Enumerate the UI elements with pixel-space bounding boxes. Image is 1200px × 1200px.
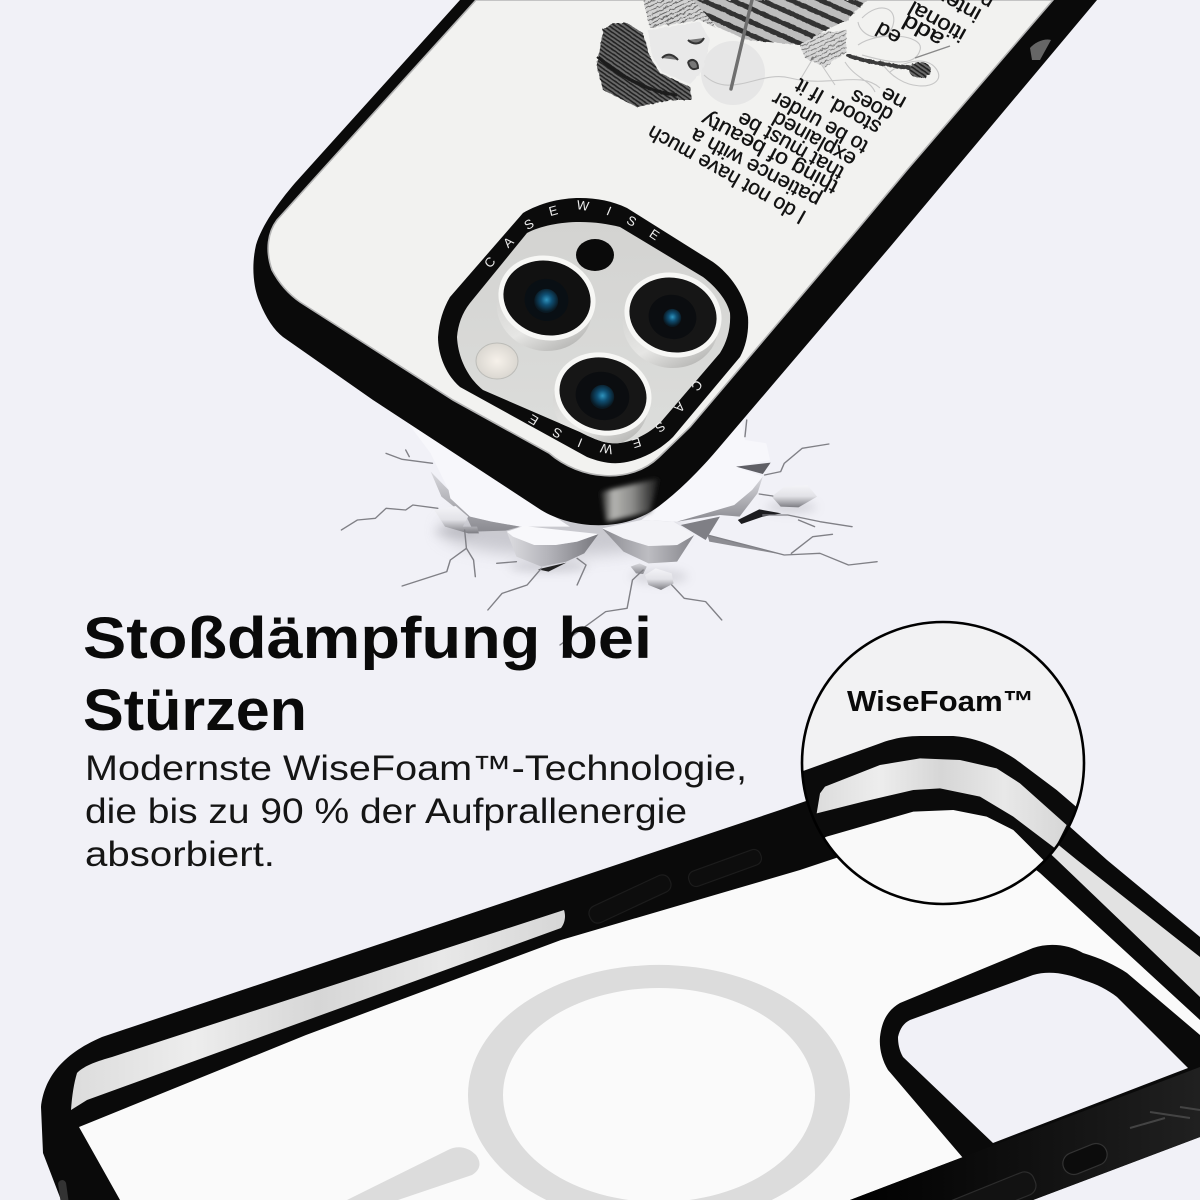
body text: die bis zu 90 % der Aufprallenergie <box>85 792 687 831</box>
frame streaks <box>1130 1107 1200 1128</box>
body text: absorbiert. <box>85 835 275 874</box>
outer black frame <box>41 764 1200 1200</box>
crater: cracked ground under the phone <box>341 420 877 645</box>
magsafe ring <box>468 965 850 1200</box>
foam gap right <box>1040 838 1200 997</box>
heading <box>83 606 652 743</box>
lens bottom <box>554 352 652 444</box>
camera plate <box>457 222 730 443</box>
stick <box>731 0 752 89</box>
upside-down poem on the case <box>644 0 997 228</box>
left slot <box>58 1180 69 1200</box>
foam gap left <box>71 910 565 1110</box>
magnified frame corner <box>804 736 1076 860</box>
camera ring <box>438 198 748 464</box>
camera cut-out opening <box>898 973 1188 1143</box>
upside-down poem on the case: I do not have much <box>644 120 810 228</box>
bottom edge of frame <box>850 1067 1200 1200</box>
needle <box>915 46 950 58</box>
upside-down poem on the case: that must be <box>734 107 848 184</box>
callout circle: WiseFoam magnifier <box>780 622 1084 910</box>
bumper highlight <box>600 478 659 522</box>
microphone hole <box>576 239 614 271</box>
upside-down poem on the case: stood. If it <box>791 73 885 139</box>
upside-down poem on the case: ed <box>872 17 905 49</box>
flash <box>476 343 518 379</box>
face <box>648 22 710 84</box>
ring body <box>438 198 748 463</box>
body text: Modernste WiseFoam™-Technologie, <box>85 749 747 788</box>
lower phone case, inside view <box>41 764 1200 1200</box>
circle fill <box>802 622 1084 904</box>
foam strip <box>817 758 1067 848</box>
speaker button bottom <box>1060 1140 1110 1178</box>
upside-down poem on the case: patience with a <box>687 123 825 211</box>
impact shadow <box>440 504 680 556</box>
lens right <box>624 272 722 368</box>
upper phone with clear case <box>253 0 1097 526</box>
light scribbles <box>701 8 939 105</box>
brand text bottom: CASEWISE <box>528 381 702 454</box>
pill mark <box>347 1147 479 1200</box>
side buttons top <box>586 847 763 926</box>
scarf and light body <box>643 0 716 28</box>
screen <box>268 0 1053 476</box>
upside-down poem on the case: itional <box>905 0 970 46</box>
interior <box>824 810 1044 903</box>
lens top-left <box>498 256 596 351</box>
circle outline <box>802 622 1084 904</box>
case interior <box>79 842 1200 1200</box>
upside-down poem on the case: add <box>898 10 948 51</box>
upside-down poem on the case: explained <box>768 107 860 171</box>
camera cut-out frame <box>880 945 1200 1158</box>
hat <box>597 23 692 107</box>
dark striped body <box>693 0 867 45</box>
crater shapes <box>341 420 877 645</box>
arm <box>847 55 930 70</box>
sketch illustration <box>597 0 950 107</box>
face features <box>662 38 704 69</box>
hat band <box>598 57 677 95</box>
small hand tip <box>909 62 931 78</box>
black bumper <box>253 0 1097 525</box>
bottom side button <box>941 1169 1039 1200</box>
lenses clipped to plate <box>498 256 722 444</box>
hand <box>800 30 847 67</box>
upside-down poem on the case: to be under <box>768 87 872 158</box>
side button highlight <box>1030 39 1051 60</box>
upside-down poem on the case: ne <box>877 82 910 114</box>
upside-down poem on the case: does <box>846 84 897 126</box>
heading: Stoßdämpfung bei <box>83 606 652 671</box>
heading: Stürzen <box>83 678 307 743</box>
upside-down poem on the case: thing of beauty <box>697 107 842 198</box>
brand text top: CASEWISE <box>485 200 660 267</box>
label: WiseFoam™ <box>847 686 1034 718</box>
body text <box>85 749 747 874</box>
